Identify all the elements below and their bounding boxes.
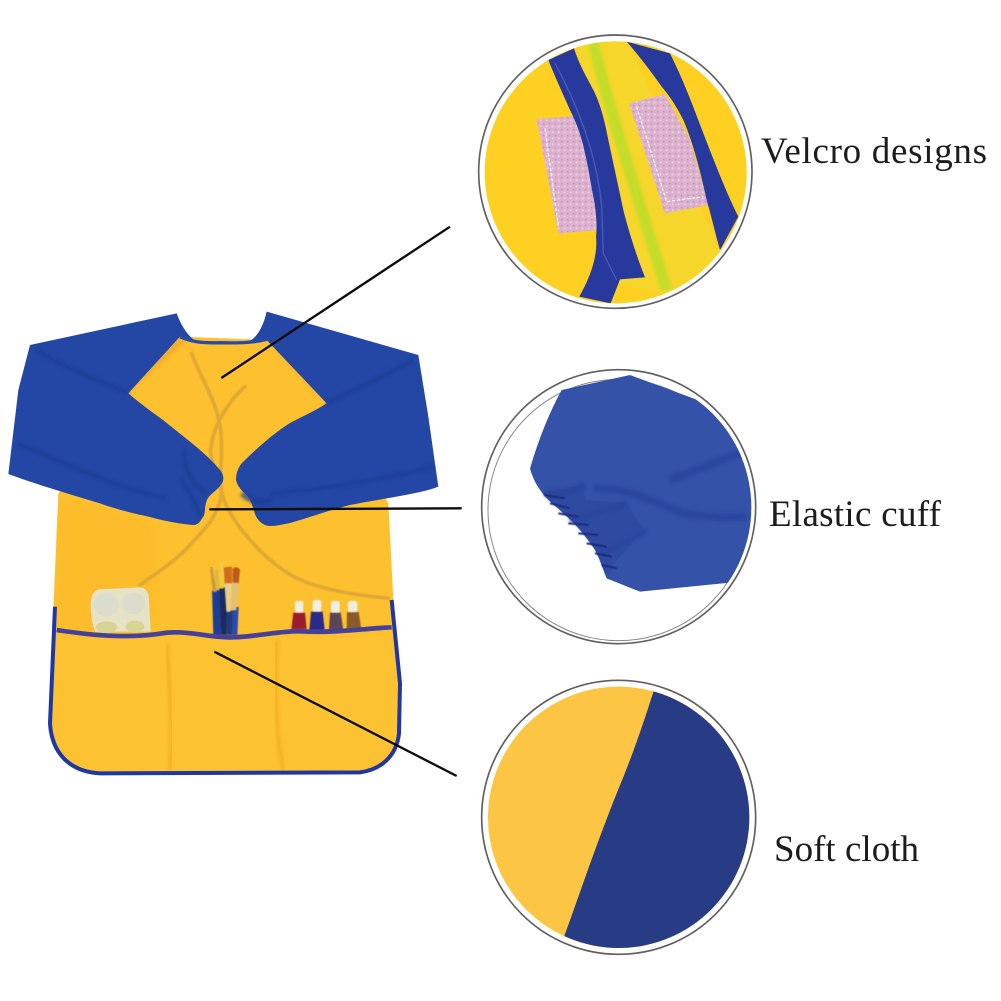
gather creases (544, 495, 617, 568)
right sleeve shading (242, 360, 433, 502)
right velcro patch (629, 94, 708, 213)
paint brushes (210, 562, 240, 635)
left sleeve (8, 313, 223, 525)
cloth swatches (488, 686, 750, 948)
text: soft cloth: Soft cloth (774, 829, 920, 870)
leader line: cuff (209, 508, 462, 509)
cuff photo (530, 375, 770, 592)
velcro circle outline (479, 35, 752, 308)
navy swatch (564, 691, 750, 948)
leader line: cloth (214, 652, 457, 776)
right navy strap (627, 42, 738, 250)
cloth circle outline (482, 680, 756, 954)
yellow swatch (488, 686, 750, 948)
detail circle: velcro (478, 34, 753, 310)
cuff circle outline (482, 370, 756, 644)
yellow-green panel (577, 40, 723, 297)
text: velcro designs: Velcro designs (761, 131, 987, 172)
velcro neck straps seam (140, 353, 388, 598)
neckline binding (180, 337, 267, 343)
smock product illustration (8, 227, 462, 776)
paint palette (91, 587, 151, 633)
paint tubes (291, 600, 361, 630)
cuff folds (545, 448, 746, 538)
elastic gathers (541, 492, 638, 570)
right sleeve (236, 312, 438, 526)
detail circle: soft cloth (480, 680, 756, 956)
cuff circle inner ring (488, 379, 749, 641)
strap stitching (555, 63, 617, 280)
outer edge binding (50, 600, 400, 773)
body fabric shading and pocket folds (50, 340, 400, 773)
left navy strap (548, 48, 645, 303)
left velcro patch (537, 116, 600, 233)
pocket edge binding (57, 627, 392, 637)
smock yellow body (48, 337, 402, 775)
detail circle: elastic cuff (482, 370, 770, 644)
velcro circle photo (484, 41, 747, 304)
left sleeve shading (17, 350, 207, 517)
text: elastic cuff: Elastic cuff (769, 494, 942, 535)
leader line: velcro (221, 227, 450, 378)
lime center fold (593, 43, 667, 290)
